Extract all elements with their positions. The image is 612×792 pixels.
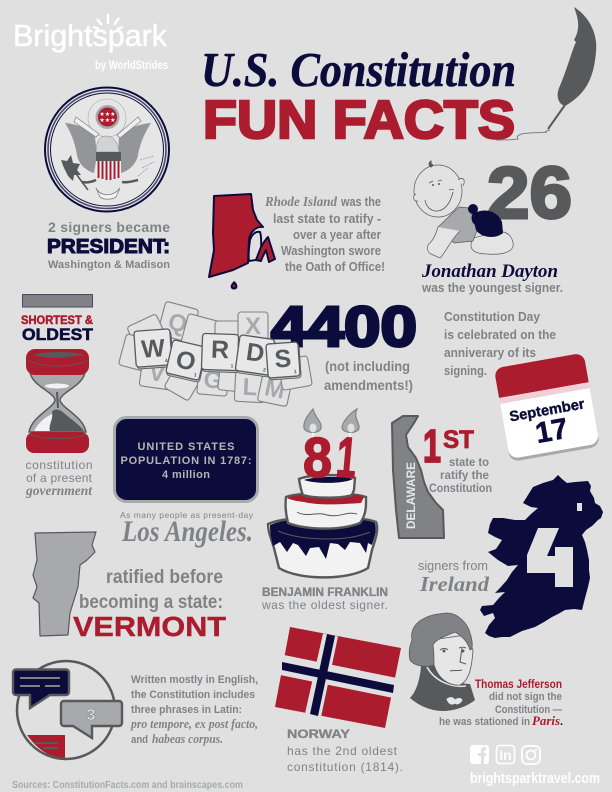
title: U.S. Constitution — [201, 42, 516, 97]
text: Rhode Island fact: was the — [340, 195, 381, 209]
icon: quill pen — [496, 7, 596, 140]
text: Thomas Jefferson fact: he was stationed in — [439, 716, 530, 728]
icon: speech bubbles in circle — [13, 661, 122, 759]
text: Latin phrases: and — [131, 734, 148, 746]
icon: speech bubbles in circle: 3 — [87, 707, 96, 724]
text: ratified before becoming a state: Vermont: becoming a state: — [79, 592, 223, 613]
text: Thomas Jefferson fact: Constitution — — [495, 704, 562, 716]
text: not including amendments — [324, 358, 413, 393]
panel: population box: 4 million — [162, 469, 210, 481]
icon: WORDS scrabble tiles: O — [173, 345, 198, 377]
icon: great seal: ★★★ — [99, 117, 116, 124]
text: constitution of a present government: government — [25, 484, 93, 499]
icon: WORDS scrabble tiles: R — [211, 336, 230, 364]
icon: Delaware map — [392, 416, 444, 538]
text: constitution of a present government: of a present — [26, 471, 93, 485]
text: Benjamin Franklin: BENJAMIN FRANKLIN — [262, 585, 388, 599]
text: 2 signers became president — [47, 219, 170, 271]
text: shortest and oldest: OLDEST — [22, 325, 94, 344]
text: ratified before becoming a state: Vermont: ratified before — [106, 567, 223, 588]
icon: background scrabble tiles: X — [245, 313, 261, 340]
text: Thomas Jefferson fact — [439, 679, 563, 728]
text: 2 signers became president: Washington & Madison — [48, 259, 170, 271]
text: 1st state to ratify: Constitution — [429, 483, 492, 495]
text: not including amendments: amendments!) — [324, 377, 413, 393]
text: Rhode Island fact: Rhode Island — [264, 195, 338, 210]
number: 4400: 4400 — [271, 295, 417, 359]
icon: ruler — [22, 294, 92, 307]
text: 2 signers became president: 2 signers became — [48, 219, 170, 235]
icon: Rhode Island map — [209, 194, 275, 290]
text: Latin phrases: the Constitution includes — [131, 689, 255, 701]
icon: background scrabble tiles — [118, 301, 312, 407]
text: constitution of a present government: constitution — [26, 458, 92, 472]
icon: calendar September 17 — [494, 353, 600, 462]
icon: great seal: ★★★ — [99, 111, 116, 118]
text: ratified before becoming a state: Vermont — [73, 567, 226, 642]
icon: WORDS scrabble tiles: S — [274, 344, 292, 374]
logo: Brightspark by WorldStrides: by WorldStrides — [95, 58, 168, 72]
text: signers from Ireland — [418, 558, 490, 596]
icon: WORDS scrabble tiles: W — [140, 334, 166, 364]
text: Constitution Day: Constitution Day — [444, 309, 541, 324]
text: Rhode Island fact — [264, 195, 385, 274]
icon: WORDS scrabble tiles: 1 — [193, 372, 197, 379]
icon: Norway flag — [275, 627, 401, 728]
icon: Thomas Jefferson portrait — [409, 613, 475, 711]
icon: great seal — [45, 88, 169, 212]
text: 2 signers became president: PRESIDENT: — [47, 236, 170, 258]
title: FUN FACTS — [203, 90, 515, 150]
icon: WORDS scrabble tiles — [134, 329, 301, 383]
icon: background scrabble tiles: Q — [165, 308, 190, 339]
text: shortest and oldest: SHORTEST & — [21, 313, 93, 327]
text: sources: Sources: ConstitutionFacts.com and brainscapes.com — [12, 779, 243, 791]
text: Jonathan Dayton — [421, 261, 563, 295]
text: Latin phrases: Written mostly in English, — [131, 674, 258, 686]
icon: WORDS scrabble tiles: 4 — [165, 358, 168, 364]
number: 26: 26 — [487, 153, 572, 234]
icon: birthday cake with 81 — [268, 409, 377, 577]
icon: social media — [470, 745, 540, 764]
text: Norway: constitution (1814). — [287, 760, 403, 774]
text: not including amendments: (not including — [325, 358, 410, 374]
text: Latin phrases: habeas corpus. — [152, 731, 223, 746]
panel: population box — [114, 418, 258, 502]
text: Benjamin Franklin: was the oldest signer. — [261, 598, 388, 612]
icon: calendar September 17: 17 — [533, 413, 570, 450]
logo: Brightspark by WorldStrides: Brightspark — [13, 18, 167, 53]
text: 1st state to ratify: ST — [443, 426, 474, 454]
title — [201, 42, 516, 150]
text: Latin phrases: pro tempore, ex post facto, — [130, 716, 258, 731]
text: Thomas Jefferson fact: Paris — [532, 713, 560, 728]
text: Constitution Day — [444, 309, 556, 378]
icon: background scrabble tiles: M — [262, 374, 287, 405]
text: constitution of a present government — [25, 458, 93, 499]
text: Norway: NORWAY — [287, 727, 350, 741]
icon: WORDS scrabble tiles: 2 — [263, 367, 266, 374]
text: Jonathan Dayton: Jonathan Dayton — [421, 261, 558, 282]
text: signers from Ireland: Ireland — [419, 572, 490, 596]
icon: crawling baby — [414, 161, 513, 258]
panel: population box: POPULATION IN 1787: — [120, 455, 252, 467]
icon: background scrabble tiles: L — [242, 374, 258, 401]
icon: WORDS scrabble tiles: 1 — [294, 369, 297, 375]
text: Rhode Island fact: last state to ratify - — [273, 212, 381, 226]
text: Constitution Day: anniverary of its — [444, 345, 536, 360]
text: Benjamin Franklin — [261, 585, 388, 612]
icon: hourglass — [26, 349, 89, 453]
icon: background scrabble tiles: G — [202, 366, 223, 395]
icon: social media: in — [499, 747, 512, 763]
panel: population box: UNITED STATES — [138, 441, 234, 453]
text: Latin phrases — [130, 674, 258, 746]
icon: birthday cake with 81: 1 — [334, 425, 359, 491]
text: Constitution Day: signing. — [444, 363, 487, 378]
icon: background scrabble tiles: V — [147, 359, 167, 388]
icon: calendar September 17: September — [508, 396, 586, 425]
text: shortest and oldest — [21, 313, 94, 344]
text: as many people as Los Angeles: Los Angeles. — [121, 515, 253, 548]
text: Thomas Jefferson fact: . — [560, 716, 563, 728]
logo: Brightspark by WorldStrides — [13, 14, 168, 72]
text: Thomas Jefferson fact: did not sign the — [489, 691, 562, 703]
text: Constitution Day: is celebrated on the — [444, 327, 556, 342]
text: Rhode Island fact: over a year after — [293, 228, 381, 242]
text: Rhode Island fact: the Oath of Office! — [285, 260, 385, 274]
text: 1st state to ratify — [423, 420, 492, 495]
text: Jonathan Dayton: was the youngest signer. — [421, 280, 563, 295]
icon: birthday cake with 81: 8 — [303, 426, 332, 490]
text: signers from Ireland: signers from — [418, 558, 488, 573]
text: 1st state to ratify: 1 — [423, 420, 441, 472]
icon: WORDS scrabble tiles: 1 — [230, 363, 234, 369]
text: 1st state to ratify: ratify the — [440, 470, 489, 482]
text: Thomas Jefferson fact: Thomas Jefferson — [475, 679, 562, 691]
icon: Delaware map: DELAWARE — [406, 462, 418, 529]
icon: WORDS scrabble tiles: D — [244, 338, 266, 368]
text: 1st state to ratify: state to — [449, 457, 489, 469]
text: ratified before becoming a state: Vermont: VERMONT — [73, 611, 226, 642]
text: Rhode Island fact: Washington swore — [281, 244, 381, 258]
text: as many people as Los Angeles: As many people as present-day — [120, 510, 254, 520]
text: Norway — [287, 727, 403, 774]
text: Latin phrases: three phrases in Latin: — [131, 704, 242, 716]
icon: Vermont map — [33, 532, 96, 636]
text: Norway: has the 2nd oldest — [287, 744, 398, 758]
icon: Ireland map with 4 — [480, 475, 603, 638]
